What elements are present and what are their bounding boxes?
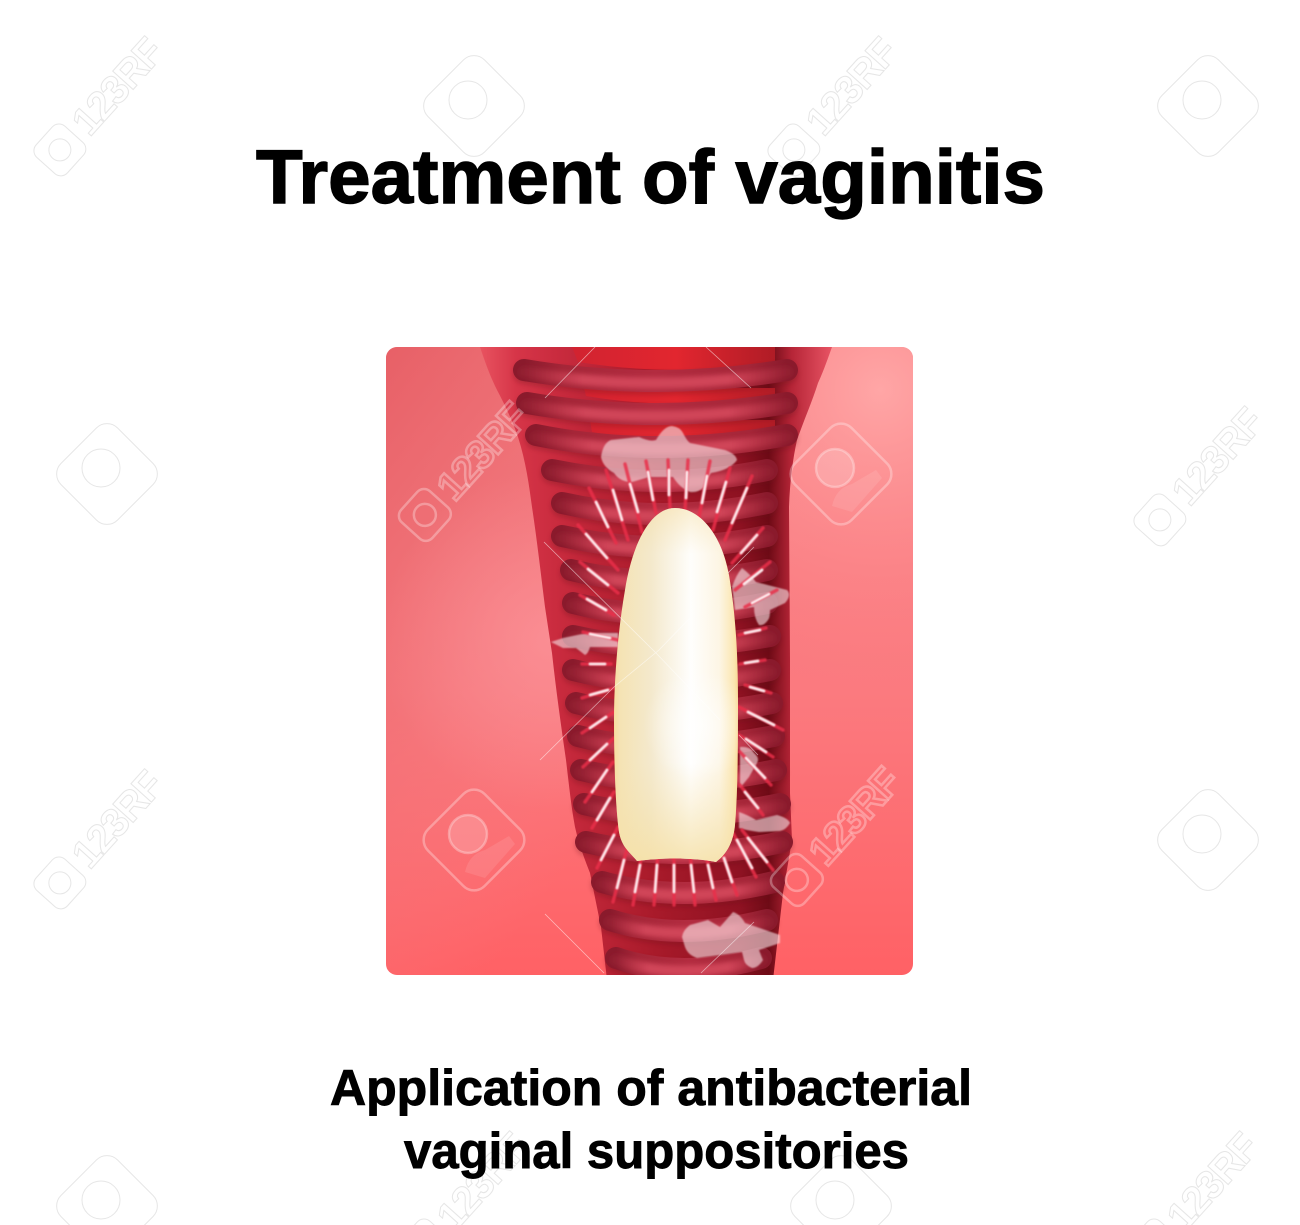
title: Treatment of vaginitis xyxy=(256,135,1045,220)
suppository xyxy=(614,508,738,862)
panel: anatomical illustration xyxy=(386,347,913,980)
caption line 1: Application of antibacterial xyxy=(330,1060,972,1116)
caption xyxy=(330,1060,972,1179)
thin watermark lines xyxy=(540,347,758,973)
deep canal lumen xyxy=(572,347,775,440)
panel background xyxy=(386,347,913,975)
discharge patches xyxy=(551,426,790,968)
mucosal folds xyxy=(524,370,787,972)
watermarks on panel xyxy=(395,396,909,911)
canal wall xyxy=(480,347,832,980)
radiating medicine rays xyxy=(578,460,783,905)
caption line 2: vaginal suppositories xyxy=(404,1123,909,1179)
